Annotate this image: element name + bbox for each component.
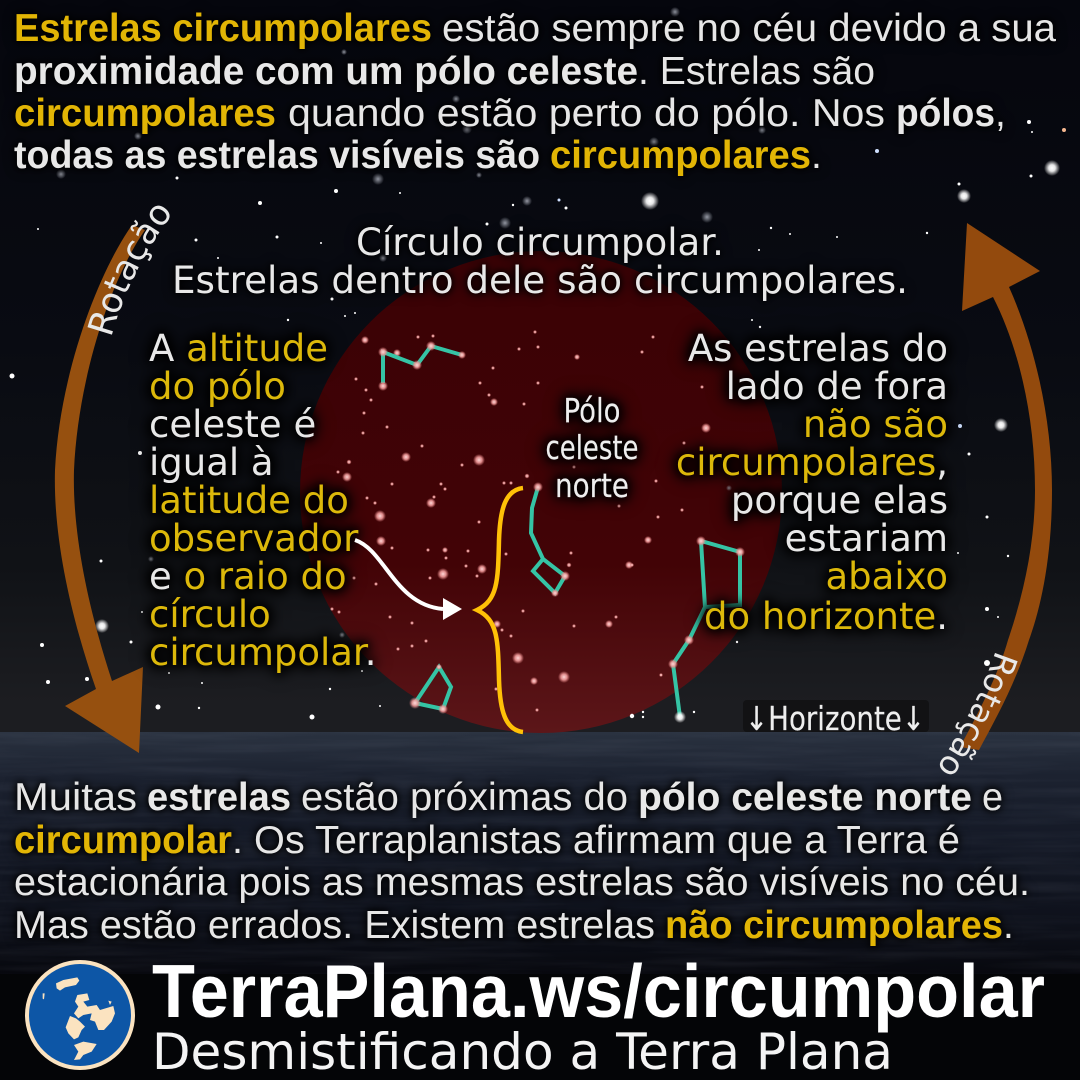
text: right explanation: circumpolares,: [676, 441, 948, 484]
constellation: Ursa Minor: [531, 482, 570, 597]
heading: intro paragraph: proximidade com um pólo celeste: [14, 50, 638, 93]
text: circle title: Estrelas dentro dele são circumpolares.: [172, 259, 908, 302]
text: left explanation: círculo: [149, 593, 271, 636]
footer: site address: TerraPlana.ws/circumpolar: [152, 949, 1045, 1033]
heading: intro paragraph: Estrelas circumpolares: [14, 7, 432, 50]
text: bottom paragraph: circumpolar: [14, 819, 232, 862]
heading: intro paragraph: todas as estrelas visíveis são: [14, 134, 540, 177]
text: right explanation: estariam: [785, 517, 948, 560]
heading: intro paragraph: ,: [995, 92, 1006, 135]
text: left explanation: e o raio do: [149, 555, 347, 598]
heading: intro paragraph: pólos: [896, 92, 995, 135]
heading: intro paragraph: estão sempre no céu devido a sua: [442, 7, 1056, 50]
background: sea at the horizon: [0, 732, 1080, 974]
circumpolar circle: [300, 251, 782, 733]
background: footer band: [0, 974, 1080, 1080]
label: left rotation: Rotação: [88, 206, 170, 335]
label: horizon backdrop: [743, 700, 929, 732]
heading: intro paragraph: quando estão perto do pólo. Nos: [288, 92, 885, 135]
text: bottom paragraph: estão próximas do: [301, 776, 628, 819]
text: right explanation: porque elas: [731, 479, 948, 522]
text: left explanation: igual à: [149, 441, 274, 484]
text: left explanation: do pólo: [149, 365, 286, 408]
text: left explanation: A altitude: [149, 327, 328, 370]
arrow: right rotation: [960, 223, 1052, 750]
heading: intro paragraph: circumpolares: [550, 134, 811, 177]
text: bottom paragraph: Muitas: [14, 776, 137, 819]
footer: tagline: Desmistificando a Terra Plana: [152, 1023, 893, 1080]
arrow: from text to brace: [355, 540, 462, 620]
text: left explanation: celeste é: [149, 403, 316, 446]
label: horizon: ↓Horizonte↓: [745, 699, 925, 738]
text: right explanation: do horizonte.: [704, 595, 948, 638]
text: left explanation: latitude do: [149, 479, 349, 522]
text: right explanation: [676, 327, 948, 638]
heading: intro paragraph: .: [811, 134, 822, 177]
constellation: Cassiopeia: [378, 341, 466, 391]
text: left explanation: [149, 327, 377, 674]
heading: intro paragraph: circumpolares: [14, 92, 276, 135]
text: bottom paragraph: [14, 776, 1030, 947]
text: circle title: [172, 221, 908, 302]
text: left explanation: observador: [149, 517, 359, 560]
field of stars in the sky: [10, 7, 1066, 720]
text: bottom paragraph: estrelas: [147, 776, 291, 819]
label: north celestial pole: celeste: [546, 428, 638, 467]
icon: flat earth globe: [25, 960, 135, 1070]
background: wave texture: [0, 732, 1080, 974]
text: bottom paragraph: . Os Terraplanistas afirmam que a Terra é: [232, 819, 960, 862]
text: bottom paragraph: não circumpolares: [665, 904, 1003, 947]
heading: intro paragraph: . Estrelas são: [638, 50, 875, 93]
field of pink stars inside the circle: [330, 330, 732, 712]
heading: intro paragraph: [14, 7, 1056, 177]
text: left explanation: circumpolar.: [149, 631, 377, 674]
text: bottom paragraph: estacionária pois as mesmas estrelas são visíveis no céu.: [14, 861, 1030, 904]
label: north celestial pole: [546, 391, 638, 505]
text: bottom paragraph: pólo celeste norte: [638, 776, 972, 819]
text: right explanation: lado de fora: [726, 365, 948, 408]
brace: altitude of the pole: [477, 488, 523, 732]
label: right rotation: Rotação: [940, 653, 1018, 774]
text: bottom paragraph: .: [1003, 904, 1014, 947]
label: north celestial pole: Pólo: [564, 391, 620, 430]
constellation: lower left: [409, 664, 451, 714]
arrow: left rotation: [55, 225, 145, 753]
text: circle title: Círculo circumpolar.: [356, 221, 724, 264]
constellation: Ursa Major: [668, 536, 745, 723]
text: right explanation: abaixo: [825, 555, 948, 598]
background: night sky: [0, 0, 1080, 733]
label: north celestial pole: norte: [555, 466, 629, 505]
text: bottom paragraph: e: [982, 776, 1003, 819]
text: bottom paragraph: Mas estão errados. Existem estrelas: [14, 904, 655, 947]
text: right explanation: As estrelas do: [688, 327, 948, 370]
text: right explanation: não são: [803, 403, 948, 446]
